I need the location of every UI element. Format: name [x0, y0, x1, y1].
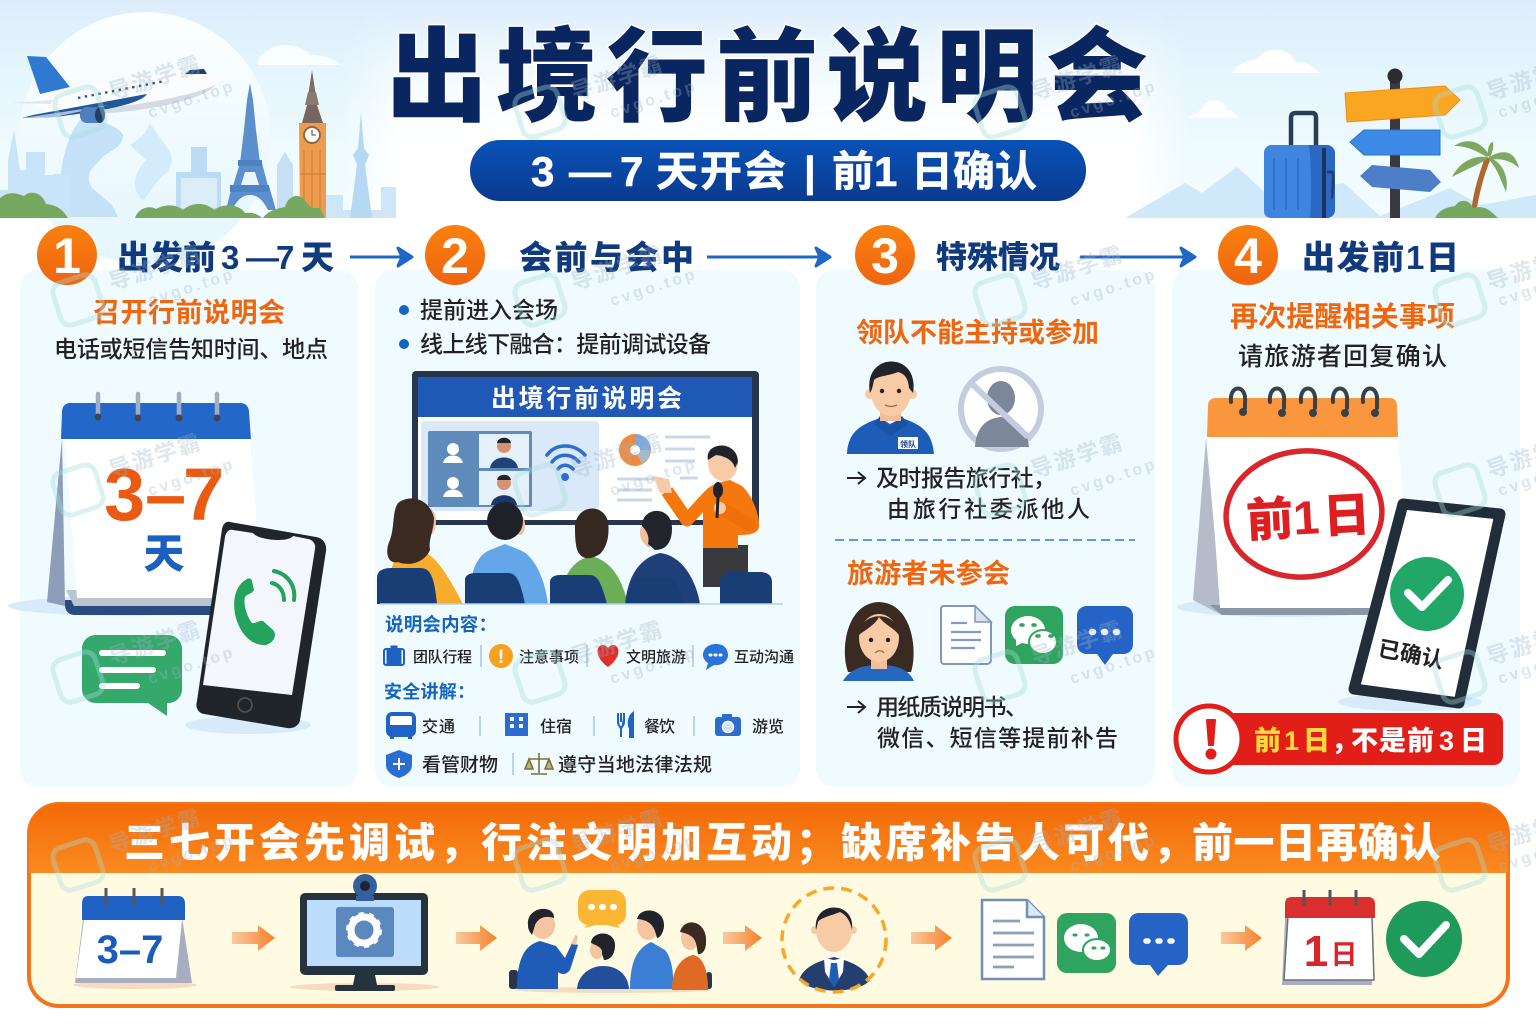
watermarks: 导游学霸	[1028, 241, 1127, 295]
watermarks: cvgo.top	[146, 644, 237, 688]
icon: calendar day before: 前1日	[1245, 488, 1371, 547]
icon: team leader: 领队	[900, 439, 916, 449]
icon: small calendar	[73, 888, 197, 989]
watermarks: cvgo.top	[1068, 78, 1159, 122]
icon: phone confirmed	[1338, 503, 1500, 711]
text: make-up notice	[847, 694, 1118, 751]
arrow	[911, 925, 952, 951]
text: make-up notice: 用纸质说明书、	[876, 694, 1028, 720]
bullet list: 提前进入会场	[420, 297, 558, 323]
heading: leader unavailable: 领队不能主持或参加	[856, 318, 1099, 348]
arrow: step 3 to 4	[1080, 248, 1195, 266]
step 2 heading row: 2	[441, 228, 469, 284]
watermarks: 导游学霸	[106, 429, 205, 483]
text: report to agency: 及时报告旅行社，	[876, 465, 1056, 491]
row: meeting content items: 注意事项	[519, 648, 579, 666]
step 1 heading row: 出发前3—7天	[117, 239, 334, 276]
step 3 heading row: 特殊情况	[936, 240, 1060, 275]
watermarks: 导游学霸	[568, 241, 667, 295]
icon: SMS small	[1129, 913, 1188, 976]
row: belongings and laws: 遵守当地法律法规	[558, 754, 712, 776]
arrow: step 2 to 3	[707, 248, 830, 266]
icon: suitcase	[1264, 113, 1335, 218]
icon: phone confirmed: 已确认	[1376, 636, 1446, 673]
step 1 heading row: 1	[53, 228, 81, 284]
title: 出境行前说明会	[386, 21, 1148, 135]
icon: TV tower	[350, 112, 372, 218]
text: report to agency	[847, 465, 1090, 522]
text: report to agency: 由旅行社委派他人	[887, 496, 1090, 522]
icon: plane	[10, 56, 216, 123]
watermarks: 导游学霸	[106, 51, 205, 105]
watermarks: 导游学霸	[106, 241, 205, 295]
icon: green chat bubble	[82, 635, 182, 716]
watermarks: 导游学霸	[1028, 51, 1127, 105]
row: safety items: 游览	[752, 718, 784, 736]
watermarks: 导游学霸	[568, 51, 667, 105]
watermarks: 导游学霸	[106, 804, 205, 858]
heading: meeting contents: 说明会内容：	[385, 614, 497, 635]
row: meeting content items: 文明旅游	[626, 648, 686, 666]
subtitle pill: 3—7天开会|前1日确认	[531, 148, 1037, 196]
header background	[0, 0, 1536, 218]
icon: substitute leader	[782, 888, 886, 992]
row: meeting content items: 团队行程	[413, 649, 472, 666]
watermarks: cvgo.top	[1068, 266, 1159, 310]
panel backgrounds	[20, 270, 1520, 787]
row: safety items: 餐饮	[644, 718, 675, 736]
icon: absent person	[961, 369, 1041, 449]
row: belongings and laws	[386, 750, 712, 778]
text: notification: 电话或短信告知时间、地点	[54, 336, 328, 362]
row: meeting content items	[384, 644, 794, 670]
watermarks: cvgo.top	[1068, 456, 1159, 500]
row: safety items: 交通	[422, 717, 455, 736]
trees	[0, 193, 325, 218]
subtitle pill	[470, 140, 1086, 201]
icon: calendar day before	[1177, 388, 1404, 617]
heading: tourist absent: 旅游者未参会	[847, 559, 1010, 589]
icon: team leader	[847, 361, 934, 454]
row: safety items: 住宿	[540, 718, 572, 736]
heading: safety briefing: 安全讲解：	[384, 681, 475, 702]
watermarks: 导游学霸	[1028, 804, 1127, 858]
icon: monitor with settings	[290, 874, 440, 991]
icon: palm	[1435, 141, 1519, 218]
row: safety items	[388, 713, 784, 739]
text: summary mnemonic: 缺席补告人可代，	[841, 820, 1197, 866]
text: summary mnemonic	[124, 820, 1441, 866]
icon: SMS	[1077, 606, 1133, 665]
audience with chairs	[377, 498, 783, 604]
row: meeting content items: 互动沟通	[734, 649, 794, 666]
step 3 heading row	[855, 225, 1060, 285]
arrow	[723, 925, 762, 951]
chart: presentation screen	[412, 371, 759, 525]
watermarks: 导游学霸	[568, 804, 667, 858]
panel: step 4 content	[1176, 301, 1503, 772]
callout: day before not three days	[1176, 706, 1503, 772]
chart: presentation screen: 出境行前说明会	[491, 385, 682, 413]
watermarks: cvgo.top	[608, 78, 699, 122]
icon: green check	[1386, 901, 1462, 977]
arrow	[1221, 925, 1262, 951]
step 4 heading row: 出发前1日	[1302, 239, 1459, 276]
icon: red calendar: 1	[1304, 927, 1328, 976]
icon: phone with call	[185, 522, 326, 734]
bullet list	[399, 297, 711, 357]
row: belongings and laws: 看管财物	[422, 754, 498, 776]
watermarks: 导游学霸	[1028, 429, 1127, 483]
step 2 heading row: 会前与会中	[519, 239, 694, 276]
icon: WeChat small	[1057, 913, 1116, 973]
step 1 heading row	[37, 225, 334, 285]
heading: remind again: 再次提醒相关事项	[1230, 301, 1455, 332]
illustration: plane, globe and landmarks	[0, 12, 396, 264]
text: summary mnemonic: 三七开会先调试，	[124, 820, 484, 866]
panel: step 3 content	[835, 318, 1135, 751]
icon: small calendar: 3–7	[97, 928, 163, 972]
watermarks	[50, 51, 1536, 893]
watermarks: cvgo.top	[146, 266, 237, 310]
watermarks: cvgo.top	[1068, 832, 1159, 876]
text: make-up notice: 微信、短信等提前补告	[877, 725, 1118, 751]
step 2 heading row	[425, 225, 694, 285]
step 4 heading row: 4	[1234, 228, 1262, 284]
icon: red calendar: 日	[1330, 940, 1358, 970]
arrow	[456, 925, 497, 951]
panel: summary banner	[29, 804, 1508, 1006]
watermarks: cvgo.top	[608, 266, 699, 310]
icon: document	[982, 900, 1044, 979]
icon: worried woman	[843, 602, 914, 681]
watermarks: 导游学霸	[568, 429, 667, 483]
arrow	[232, 925, 275, 951]
step 4 heading row	[1218, 225, 1459, 285]
icon: Eiffel tower	[226, 83, 276, 210]
watermarks: 导游学霸	[1028, 616, 1127, 670]
row: meeting content items: !	[498, 647, 504, 668]
arrow: step 1 to 2	[350, 248, 412, 266]
heading: hold the meeting: 召开行前说明会	[93, 298, 285, 328]
presenter	[653, 445, 759, 587]
watermarks: cvgo.top	[608, 832, 699, 876]
callout: day before not three days: 前1日	[1254, 726, 1330, 756]
icon: signpost	[1345, 68, 1460, 218]
icon: Big Ben	[299, 70, 326, 218]
text: summary mnemonic: 行注文明加互动；	[481, 820, 841, 866]
step 3 heading row: 3	[871, 228, 899, 284]
text: ask to confirm: 请旅游者回复确认	[1238, 343, 1447, 371]
text: summary mnemonic: 前一日再确认	[1192, 820, 1441, 866]
callout: day before not three days: ，不是前3日	[1331, 726, 1487, 756]
watermarks: cvgo.top	[146, 456, 237, 500]
icon: group discussion	[509, 890, 712, 993]
watermarks: cvgo.top	[1068, 644, 1159, 688]
watermarks: 导游学霸	[568, 616, 667, 670]
watermarks: 导游学霸	[106, 616, 205, 670]
watermarks: cvgo.top	[608, 456, 699, 500]
icon: calendar 3-7 days: 3–7	[104, 453, 224, 536]
watermarks: cvgo.top	[146, 832, 237, 876]
panel: step 1 content	[8, 298, 328, 734]
icon: red calendar	[1282, 890, 1375, 985]
watermarks: cvgo.top	[146, 78, 237, 122]
icon: calendar 3-7 days	[8, 394, 258, 616]
panel: step 2 content	[377, 297, 794, 778]
icon: WeChat	[1005, 606, 1063, 664]
illustration: suitcase, signpost, palm	[1125, 50, 1536, 218]
icon: calendar 3-7 days: 天	[144, 531, 184, 577]
icon: paper document	[941, 606, 991, 664]
bullet list: 线上线下融合：提前调试设备	[420, 331, 711, 357]
watermarks: cvgo.top	[608, 644, 699, 688]
